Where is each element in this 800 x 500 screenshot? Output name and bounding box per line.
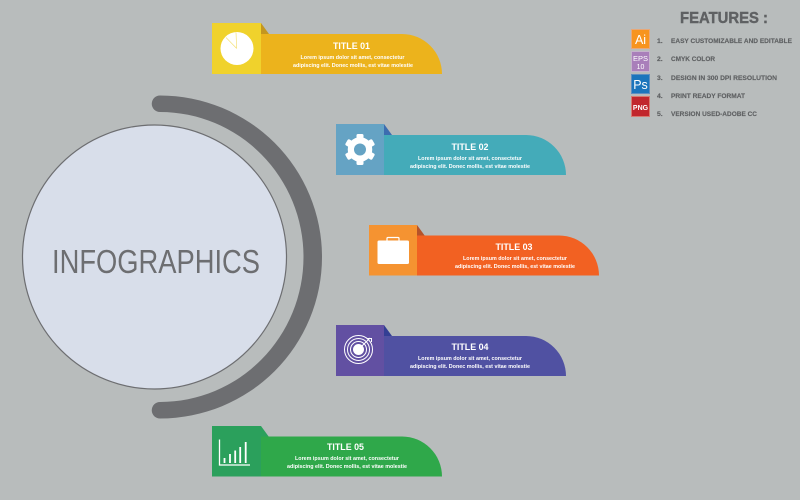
icon: PNG: PNG (633, 105, 649, 112)
icon: Ps (632, 74, 650, 94)
panel: title 01: TITLE 01 (333, 41, 371, 52)
icon: EPS 10: 10 (637, 64, 644, 71)
panel: title 03: adipiscing elit. Donec mollis, est vitae molestie (455, 264, 576, 270)
main circle with heading: INFOGRAPHICS (52, 244, 260, 281)
arc around circle (152, 96, 322, 418)
icon: Ps: Ps (633, 78, 648, 92)
features list: 3. (657, 75, 663, 82)
panel: title 04 (336, 325, 566, 376)
icon: pie chart (220, 32, 254, 65)
panel: title 04: TITLE 04 (452, 342, 489, 353)
panel: title 03: Lorem ipsum dolor sit amet, consectetur (463, 256, 568, 262)
panel: title 01: Lorem ipsum dolor sit amet, consectetur (300, 55, 405, 61)
panel: title 02: TITLE 02 (452, 142, 488, 153)
panel: title 04: adipiscing elit. Donec mollis, est vitae molestie (410, 364, 531, 370)
features list: 1. (657, 38, 663, 45)
icon: Ai (632, 30, 650, 48)
icon: Ai: Ai (635, 33, 646, 47)
features list: 2. (657, 56, 663, 63)
panel: title 05: adipiscing elit. Donec mollis, est vitae molestie (287, 464, 408, 470)
panel: title 03 (369, 225, 599, 276)
panel: title 01 (212, 23, 442, 74)
features list: VERSION USED-ADOBE CC (671, 111, 757, 118)
panel: title 05: TITLE 05 (327, 442, 365, 453)
panel: title 05: Lorem ipsum dolor sit amet, consectetur (295, 456, 400, 462)
panel: title 02 (336, 124, 566, 175)
panel: title 03: TITLE 03 (496, 242, 532, 253)
features list: PRINT READY FORMAT (671, 93, 746, 100)
icon: gear (345, 134, 375, 165)
icon: target (344, 336, 372, 364)
features list: 5. (657, 111, 663, 118)
panel: title 04: Lorem ipsum dolor sit amet, consectetur (418, 356, 523, 362)
icon: EPS 10 (632, 52, 650, 72)
main circle with heading (22, 125, 286, 389)
features list: EASY CUSTOMIZABLE AND EDITABLE (671, 38, 792, 45)
features list (657, 38, 792, 118)
features list: CMYK COLOR (671, 56, 715, 63)
icon: EPS 10: EPS (633, 54, 648, 63)
icon: PNG (632, 96, 650, 116)
panel: title 02: Lorem ipsum dolor sit amet, consectetur (418, 156, 523, 162)
features list: DESIGN IN 300 DPI RESOLUTION (671, 75, 777, 82)
panel: title 05 (212, 426, 442, 476)
icon: briefcase (378, 238, 409, 264)
features list: 4. (657, 93, 663, 100)
icon: bar chart (220, 440, 250, 465)
heading: features: FEATURES : (680, 10, 768, 27)
panel: title 02: adipiscing elit. Donec mollis, est vitae molestie (410, 164, 531, 170)
panel: title 01: adipiscing elit. Donec mollis, est vitae molestie (293, 63, 414, 69)
